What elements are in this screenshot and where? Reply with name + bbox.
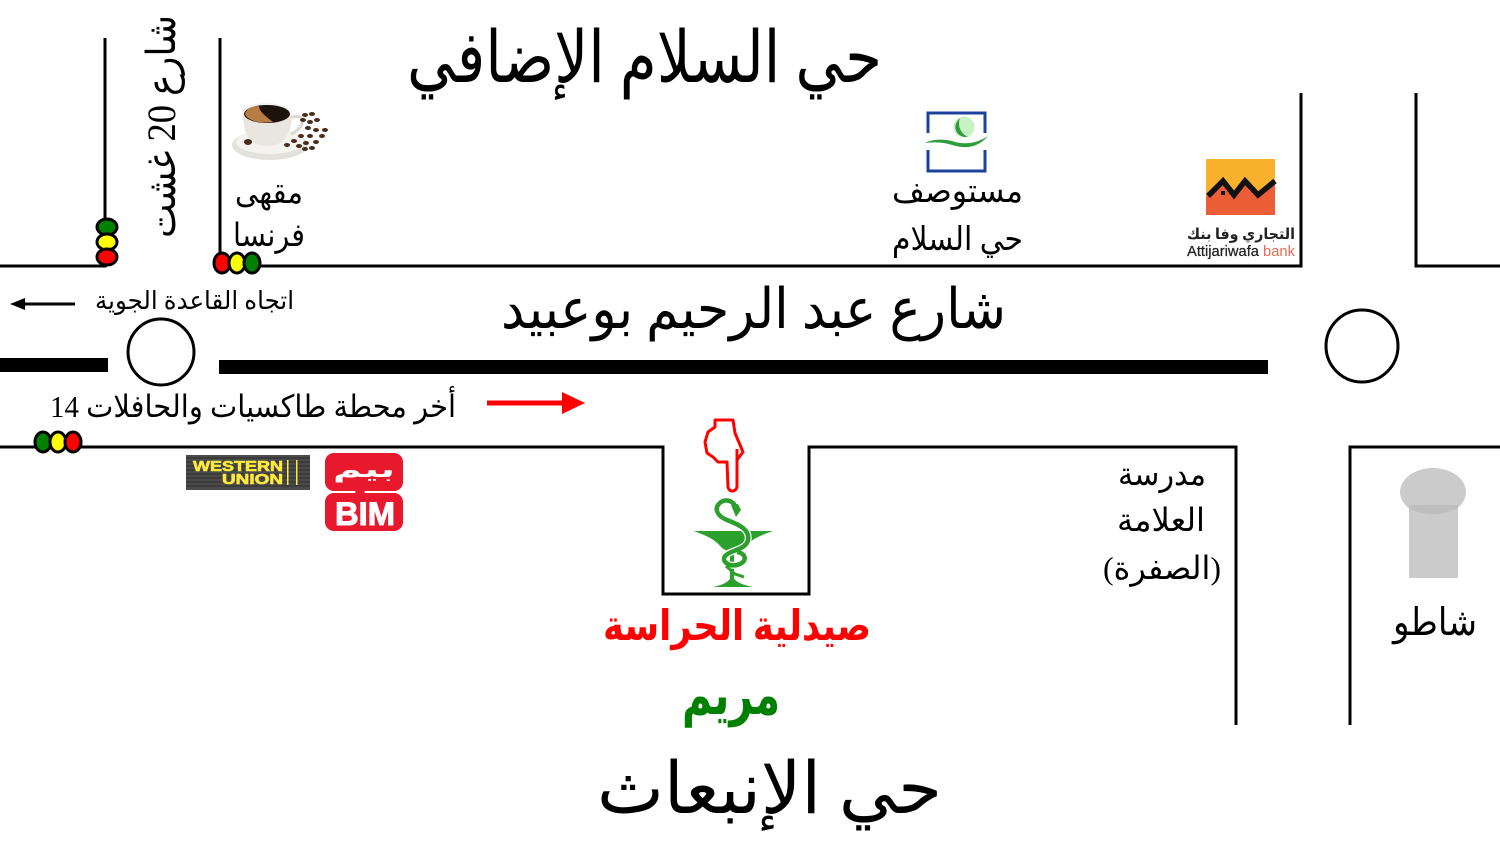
icon: water tower <box>1400 468 1466 578</box>
logo: Western Union: UNION <box>222 472 283 488</box>
arrow: airbase direction <box>10 298 75 310</box>
icon: coffee cup <box>232 103 328 160</box>
label: cafe: مقهى <box>235 174 303 211</box>
logo: BIM <box>325 453 403 532</box>
pharmacy name: صيدلية الحراسة <box>603 604 871 651</box>
traffic light: south road <box>35 432 81 452</box>
roundabout east <box>1326 310 1398 382</box>
logo: BIM: بيم <box>333 457 395 482</box>
label: health centre: مستوصف <box>892 174 1023 210</box>
icon: bowl of Hygieia <box>694 500 773 587</box>
logo: Attijariwafa bank <box>1187 159 1296 260</box>
label: school <box>1103 456 1221 587</box>
heading: south district: حي الإنبعاث <box>597 749 942 831</box>
traffic light: cafe corner <box>214 253 260 273</box>
label: cafe: فرنسا <box>233 217 305 254</box>
label: chateau: شاطو <box>1391 602 1477 645</box>
label: school: (الصفرة) <box>1103 550 1221 587</box>
traffic light: west vertical road <box>97 219 117 265</box>
logo: Attijariwafa bank: التجاري وفا بنك <box>1187 227 1295 244</box>
label: health centre <box>892 174 1023 258</box>
logo: Western Union <box>186 455 310 490</box>
label: school: العلامة <box>1117 502 1205 538</box>
heading: north district: حي السلام الإضافي <box>407 18 882 100</box>
icon: health centre logo <box>925 113 988 171</box>
label: taxi stop: أخر محطة طاكسيات والحافلات 14 <box>50 386 456 425</box>
logo: Western Union: WESTERN <box>193 459 283 475</box>
road median <box>0 358 1268 374</box>
arrow: red direction <box>487 392 585 414</box>
icon: red pointing hand <box>705 420 743 491</box>
label: health centre: حي السلام <box>892 222 1023 258</box>
logo: BIM: BIM <box>335 496 395 532</box>
roundabout west <box>128 319 194 385</box>
logo: Attijariwafa bank: Attijariwafa bank <box>1187 244 1296 260</box>
label: school: مدرسة <box>1118 456 1206 493</box>
pharmacist name: مريم <box>682 665 780 728</box>
label: airbase direction: اتجاه القاعدة الجوية <box>95 288 294 315</box>
label: vertical street: شارع 20 غشت <box>139 15 185 238</box>
label: cafe <box>233 174 305 254</box>
heading: street name: شارع عبد الرحيم بوعبيد <box>501 279 1006 342</box>
